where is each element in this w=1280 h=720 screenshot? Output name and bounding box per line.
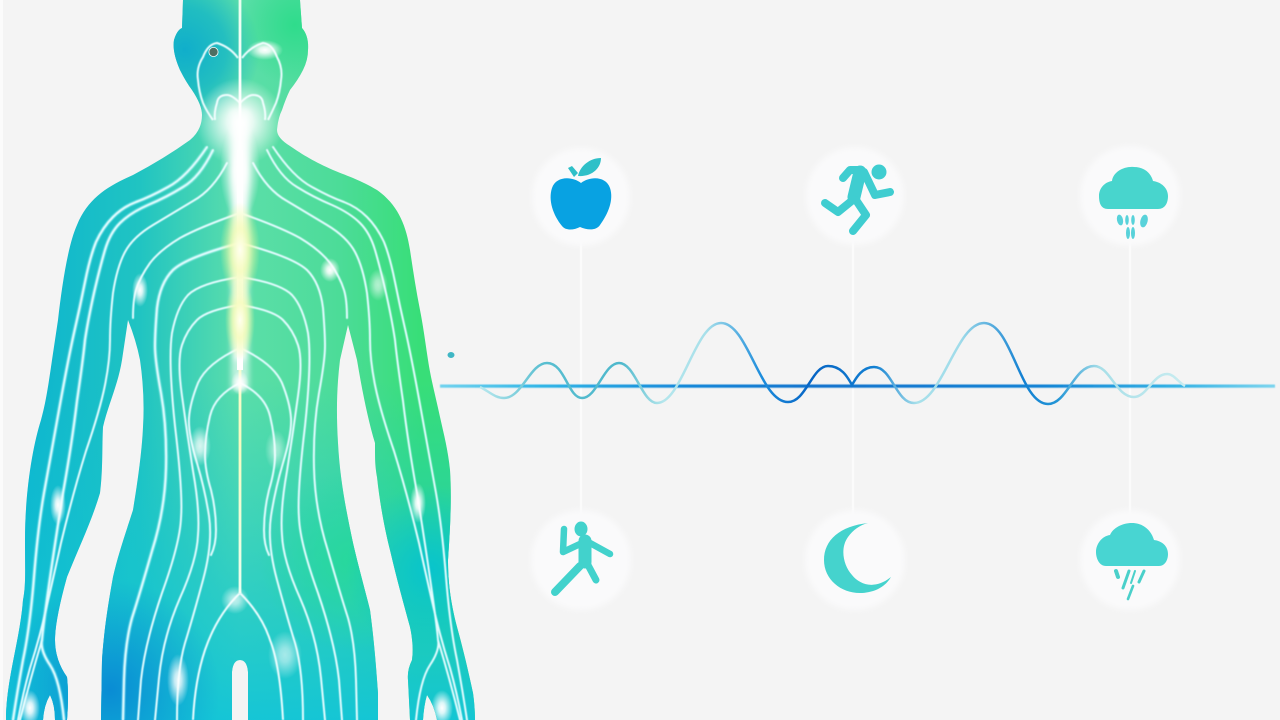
drops [1116,214,1149,239]
spine glow [231,110,249,390]
right meridian lines [240,147,467,720]
apple body [551,178,611,230]
central spine [239,0,241,593]
cloud shape [1099,167,1168,209]
chest glow [221,204,259,293]
icon: stretching figure [531,510,631,610]
icon: cloud with drops [1080,146,1180,246]
stretching figure [555,522,610,592]
oscillating wave [480,323,1185,404]
icon: apple [532,148,630,246]
icon: crescent moon [805,510,905,610]
moon [824,523,891,593]
small marker near wave start [448,352,454,358]
rain streaks [1116,571,1144,599]
stretching figure halo [531,510,631,610]
moon halo [805,510,905,610]
head loops [198,43,282,120]
runner halo [806,147,904,245]
left meridian lines [13,147,240,720]
lower arch lines [193,593,283,720]
runner figure [825,164,890,231]
rain cloud halo [1080,510,1180,610]
horizontal baseline [440,384,1275,388]
energy meridian lines [13,0,467,720]
human body figure [0,0,480,720]
icon: runner [806,147,904,245]
spine bright core [235,120,245,360]
apple halo [532,148,630,246]
wave chart [440,323,1275,404]
rain cloud shape [1096,523,1168,566]
sparkles [20,258,453,720]
icon: cloud with rain [1080,510,1180,610]
apple leaf [568,158,601,177]
glow under the lines, left side [13,147,240,720]
eye dot [209,47,218,57]
vertical connectors [581,240,1130,515]
cloud halo [1080,146,1180,246]
body silhouette [0,0,480,720]
neck glow [198,80,281,161]
brow glow [247,40,283,60]
